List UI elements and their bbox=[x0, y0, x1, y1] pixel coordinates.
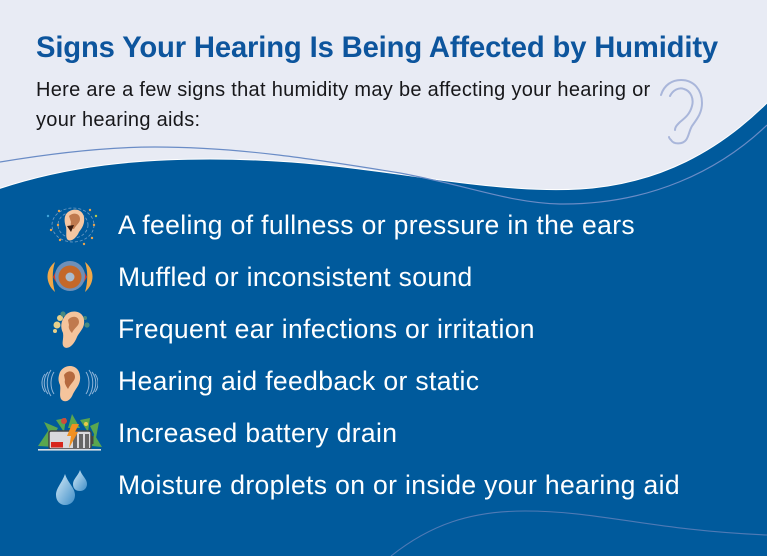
intro text: Here are a few signs that humidity may be affecting your hearing or bbox=[36, 79, 650, 101]
item 3 text: Frequent ear infections or irritation bbox=[118, 314, 535, 344]
icon: water droplets bbox=[56, 470, 87, 505]
item 6 text: Moisture droplets on or inside your hearing aid bbox=[118, 470, 680, 500]
intro text bbox=[36, 79, 650, 131]
icon: ear with particles bbox=[46, 208, 98, 246]
icon: irritated ear bbox=[53, 311, 90, 348]
item 2 text: Muffled or inconsistent sound bbox=[118, 262, 473, 292]
item 5 text: Increased battery drain bbox=[118, 418, 397, 448]
intro text: your hearing aids: bbox=[36, 109, 200, 131]
item 1 text: A feeling of fullness or pressure in the ears bbox=[118, 210, 635, 240]
item 4 text: Hearing aid feedback or static bbox=[118, 366, 479, 396]
icon: ear outline bbox=[660, 79, 703, 144]
title: Signs Your Hearing Is Being Affected by Humidity bbox=[36, 32, 718, 64]
icon: ear with static waves bbox=[42, 366, 98, 402]
icon: speaker with sound waves bbox=[48, 261, 92, 292]
icon: battery with leaves bbox=[38, 414, 102, 451]
